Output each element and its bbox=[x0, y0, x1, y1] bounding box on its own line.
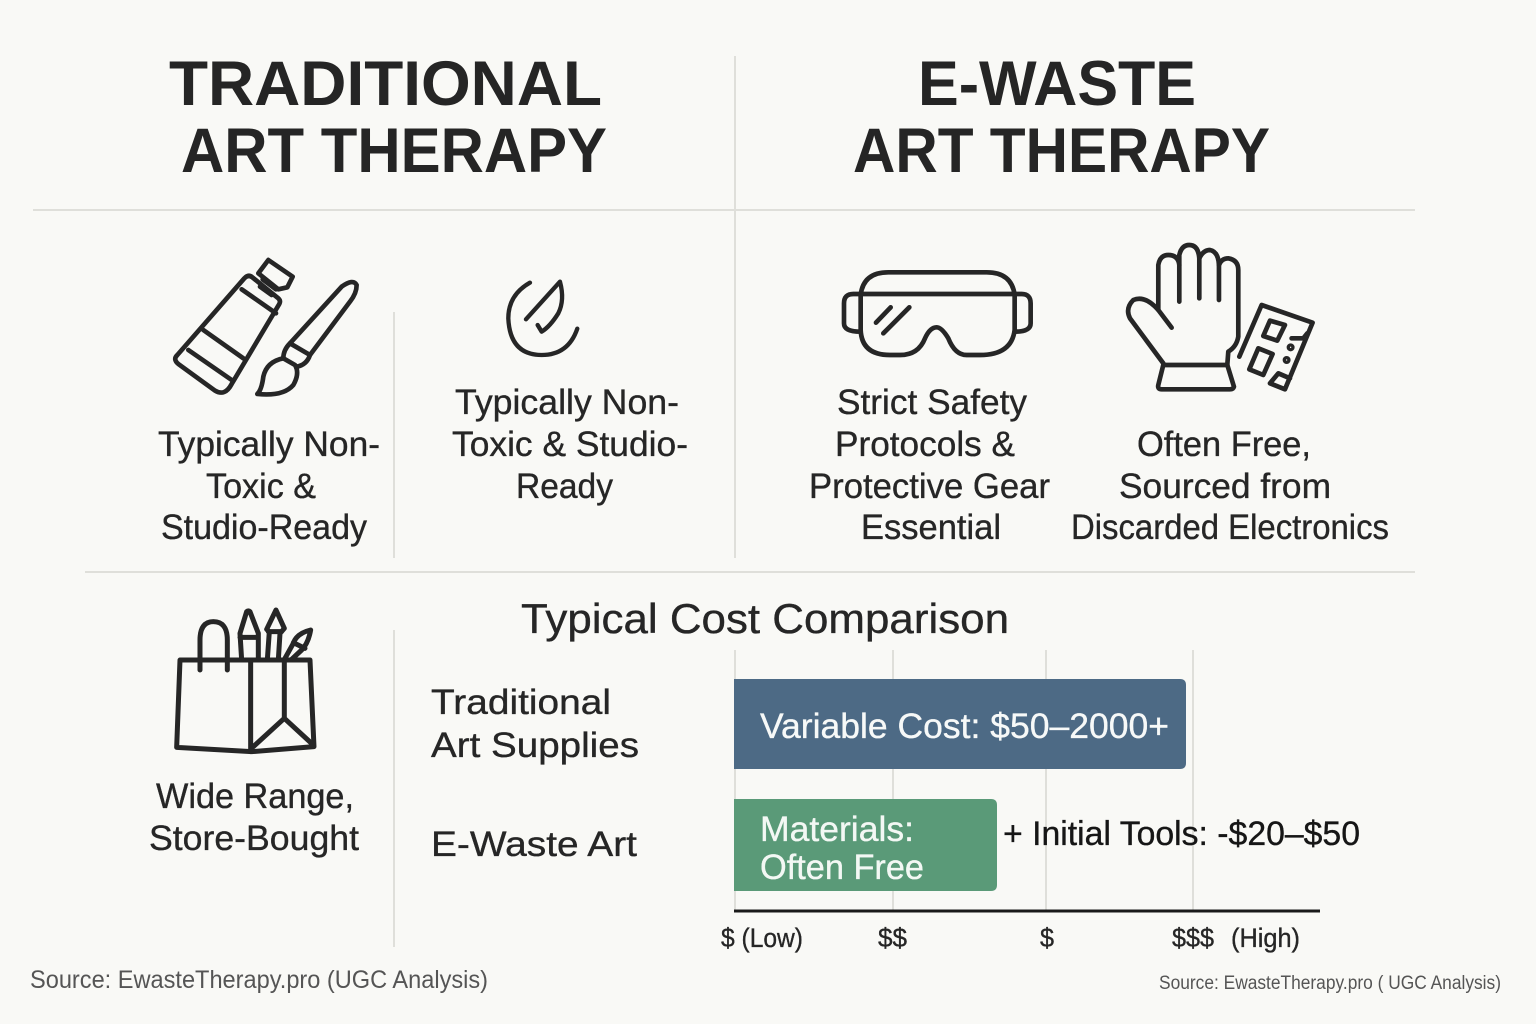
source note: left: Source: EwasteTherapy.pro (UGC Analysis) bbox=[30, 966, 488, 994]
text: strict safety protocols: Protocols & bbox=[835, 425, 1015, 464]
source note: right: Source: EwasteTherapy.pro ( UGC Analysis) bbox=[1159, 973, 1501, 994]
text: often free, sourced from discarded electronics: Discarded Electronics bbox=[1071, 508, 1389, 547]
text: wide range, store-bought: Wide Range, bbox=[156, 777, 354, 816]
text: strict safety protocols: Strict Safety bbox=[837, 383, 1028, 422]
text: typically non-toxic and studio-ready (left) bbox=[158, 425, 380, 547]
axis labels: $ (Low) bbox=[721, 923, 803, 953]
bar: traditional variable cost: Variable Cost: $50–2000+ bbox=[760, 707, 1169, 746]
icon: safety goggles bbox=[844, 272, 1031, 355]
callout: initial tools cost: + Initial Tools: -$20–$50 bbox=[1003, 815, 1360, 853]
heading: typical cost comparison: Typical Cost Comparison bbox=[521, 595, 1009, 642]
text: often free, sourced from discarded electronics bbox=[1071, 425, 1389, 547]
bar: traditional variable cost bbox=[734, 679, 1186, 769]
icon: glove and circuit board bbox=[1128, 245, 1313, 389]
text: typically non-toxic and studio-ready (left): Studio-Ready bbox=[161, 508, 367, 547]
bar: e-waste materials: Often Free bbox=[760, 848, 924, 887]
heading: traditional art therapy bbox=[169, 49, 607, 186]
heading: traditional art therapy: TRADITIONAL bbox=[169, 49, 602, 119]
text: typically non-toxic and studio-ready (left): Typically Non- bbox=[158, 425, 380, 464]
text: wide range, store-bought bbox=[149, 777, 359, 858]
bar: e-waste materials: Materials: bbox=[760, 810, 914, 849]
heading: traditional art therapy: ART THERAPY bbox=[181, 116, 607, 186]
axis labels: (High) bbox=[1231, 923, 1300, 953]
text: typically non-toxic and studio-ready (right) bbox=[452, 383, 688, 506]
text: strict safety protocols bbox=[809, 383, 1050, 547]
axis labels bbox=[721, 923, 1300, 953]
row label: traditional art supplies: Art Supplies bbox=[431, 726, 639, 765]
text: often free, sourced from discarded electronics: Sourced from bbox=[1119, 467, 1331, 506]
text: strict safety protocols: Protective Gear bbox=[809, 467, 1050, 506]
row label: e-waste art: E-Waste Art bbox=[431, 825, 637, 864]
row label: traditional art supplies: Traditional bbox=[431, 683, 611, 722]
text: often free, sourced from discarded electronics: Often Free, bbox=[1137, 425, 1311, 464]
text: typically non-toxic and studio-ready (right): Ready bbox=[516, 467, 613, 506]
axis line bbox=[734, 910, 1320, 912]
text: typically non-toxic and studio-ready (right): Toxic & Studio- bbox=[452, 425, 688, 464]
text: wide range, store-bought: Store-Bought bbox=[149, 819, 359, 858]
axis labels: $ bbox=[1040, 923, 1054, 953]
bar chart: cost comparison bbox=[431, 650, 1360, 953]
icon: leaf in circle bbox=[508, 282, 577, 355]
text: typically non-toxic and studio-ready (right): Typically Non- bbox=[455, 383, 679, 422]
text: typically non-toxic and studio-ready (left): Toxic & bbox=[206, 467, 316, 506]
heading: e-waste art therapy bbox=[853, 49, 1270, 186]
heading: e-waste art therapy: ART THERAPY bbox=[853, 116, 1270, 186]
bar: e-waste materials bbox=[734, 799, 997, 891]
axis labels: $$$ bbox=[1172, 923, 1214, 953]
icon: paint tube and brush bbox=[175, 260, 357, 394]
row label: traditional art supplies bbox=[431, 683, 639, 765]
axis labels: $$ bbox=[878, 923, 907, 953]
text: strict safety protocols: Essential bbox=[861, 508, 1001, 547]
heading: e-waste art therapy: E-WASTE bbox=[918, 49, 1196, 119]
icon: shopping bag with brushes bbox=[177, 610, 314, 752]
